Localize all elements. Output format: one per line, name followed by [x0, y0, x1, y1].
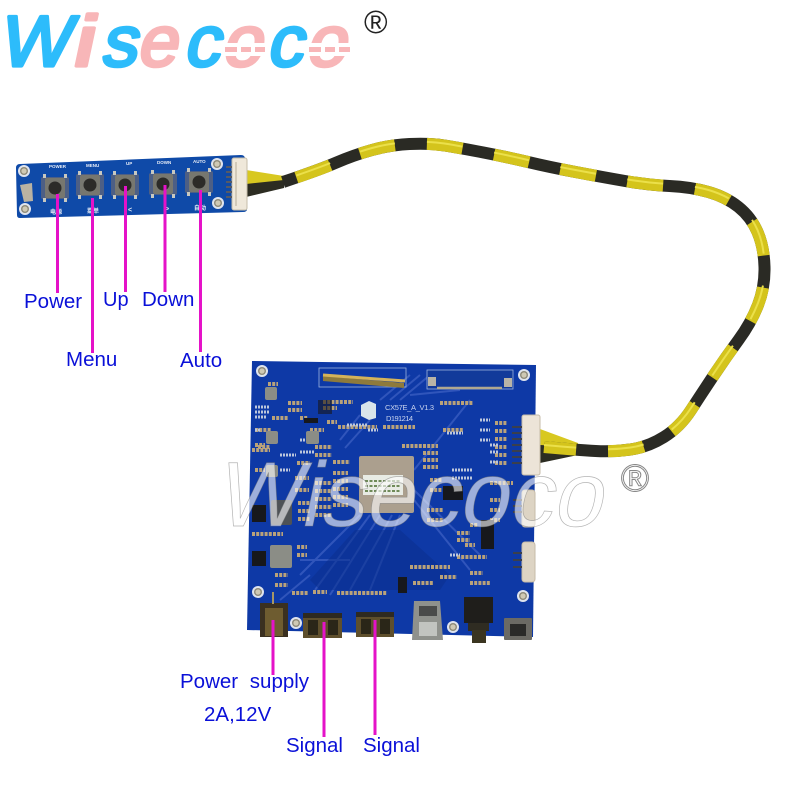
gold FPC connector — [319, 368, 406, 388]
brand logo: Wisecoco: o — [218, 2, 275, 82]
silver USB port — [412, 601, 443, 640]
brand logo: Wisecoco: i — [67, 1, 106, 82]
callout labels — [24, 288, 420, 757]
callout labels: Auto — [180, 349, 222, 372]
wire connector top right — [512, 415, 540, 475]
mounting holes — [252, 365, 530, 633]
brand logo: Wisecoco: o — [302, 2, 359, 82]
silkscreen labels: < — [128, 207, 132, 214]
black ICs — [252, 400, 494, 593]
callout labels: Up — [103, 289, 129, 311]
board model text: D191214 — [386, 414, 413, 423]
micro USB port — [504, 618, 532, 640]
control key board — [16, 155, 247, 218]
HDMI port 1 — [303, 613, 342, 638]
brand logo: Wisecoco: c — [263, 2, 316, 82]
watermark registered mark: ® — [621, 458, 649, 500]
brand logo: Wisecoco: s — [97, 2, 150, 82]
watermark: Wisecoco: Wisecoco — [211, 443, 619, 546]
callout labels: Down — [142, 288, 194, 311]
wire connector middle right — [513, 490, 535, 527]
brand logo: Wisecoco: c — [180, 2, 233, 82]
brand logo: Wisecoco: e — [133, 2, 190, 82]
callout labels: Power — [24, 290, 82, 313]
HDMI port 2 — [356, 612, 394, 637]
callout labels: Power supply — [180, 670, 310, 693]
silkscreen labels: POWER — [49, 164, 67, 169]
vendor logo — [361, 401, 376, 420]
board model text — [385, 403, 434, 423]
main driver board — [247, 361, 540, 643]
dark routing area — [310, 530, 450, 590]
callout labels: 2A,12V — [204, 703, 272, 726]
board traces — [280, 375, 480, 600]
callout lines — [58, 185, 375, 737]
power jack — [260, 592, 288, 637]
twisted yellow and black cable — [246, 142, 765, 463]
callout labels: Signal — [286, 734, 343, 757]
brand logo: Wisecoco — [0, 1, 359, 82]
silkscreen labels: MENU — [86, 163, 99, 168]
silkscreen labels: 自动 — [194, 203, 206, 212]
silkscreen labels — [49, 159, 206, 216]
silkscreen labels: AUTO — [193, 159, 206, 164]
silkscreen labels: > — [165, 206, 169, 213]
silkscreen labels: 菜单 — [87, 206, 99, 215]
registered mark: ® — [364, 4, 388, 40]
audio jack — [464, 597, 493, 643]
main chip module — [359, 456, 414, 513]
board model text: CX57E_A_V1.3 — [385, 403, 434, 412]
silkscreen labels: UP — [126, 161, 132, 166]
callout labels: Menu — [66, 348, 117, 371]
flat ribbon connector — [427, 370, 513, 389]
icon: LED — [20, 183, 33, 202]
grey inductors — [265, 387, 319, 568]
white wire connector — [226, 158, 247, 210]
silkscreen labels: DOWN — [157, 160, 171, 165]
callout labels: Signal — [363, 734, 420, 757]
wire connector lower right — [513, 542, 535, 582]
silkscreen labels: 电源 — [50, 207, 62, 216]
push buttons — [41, 168, 213, 202]
small components — [252, 384, 513, 593]
